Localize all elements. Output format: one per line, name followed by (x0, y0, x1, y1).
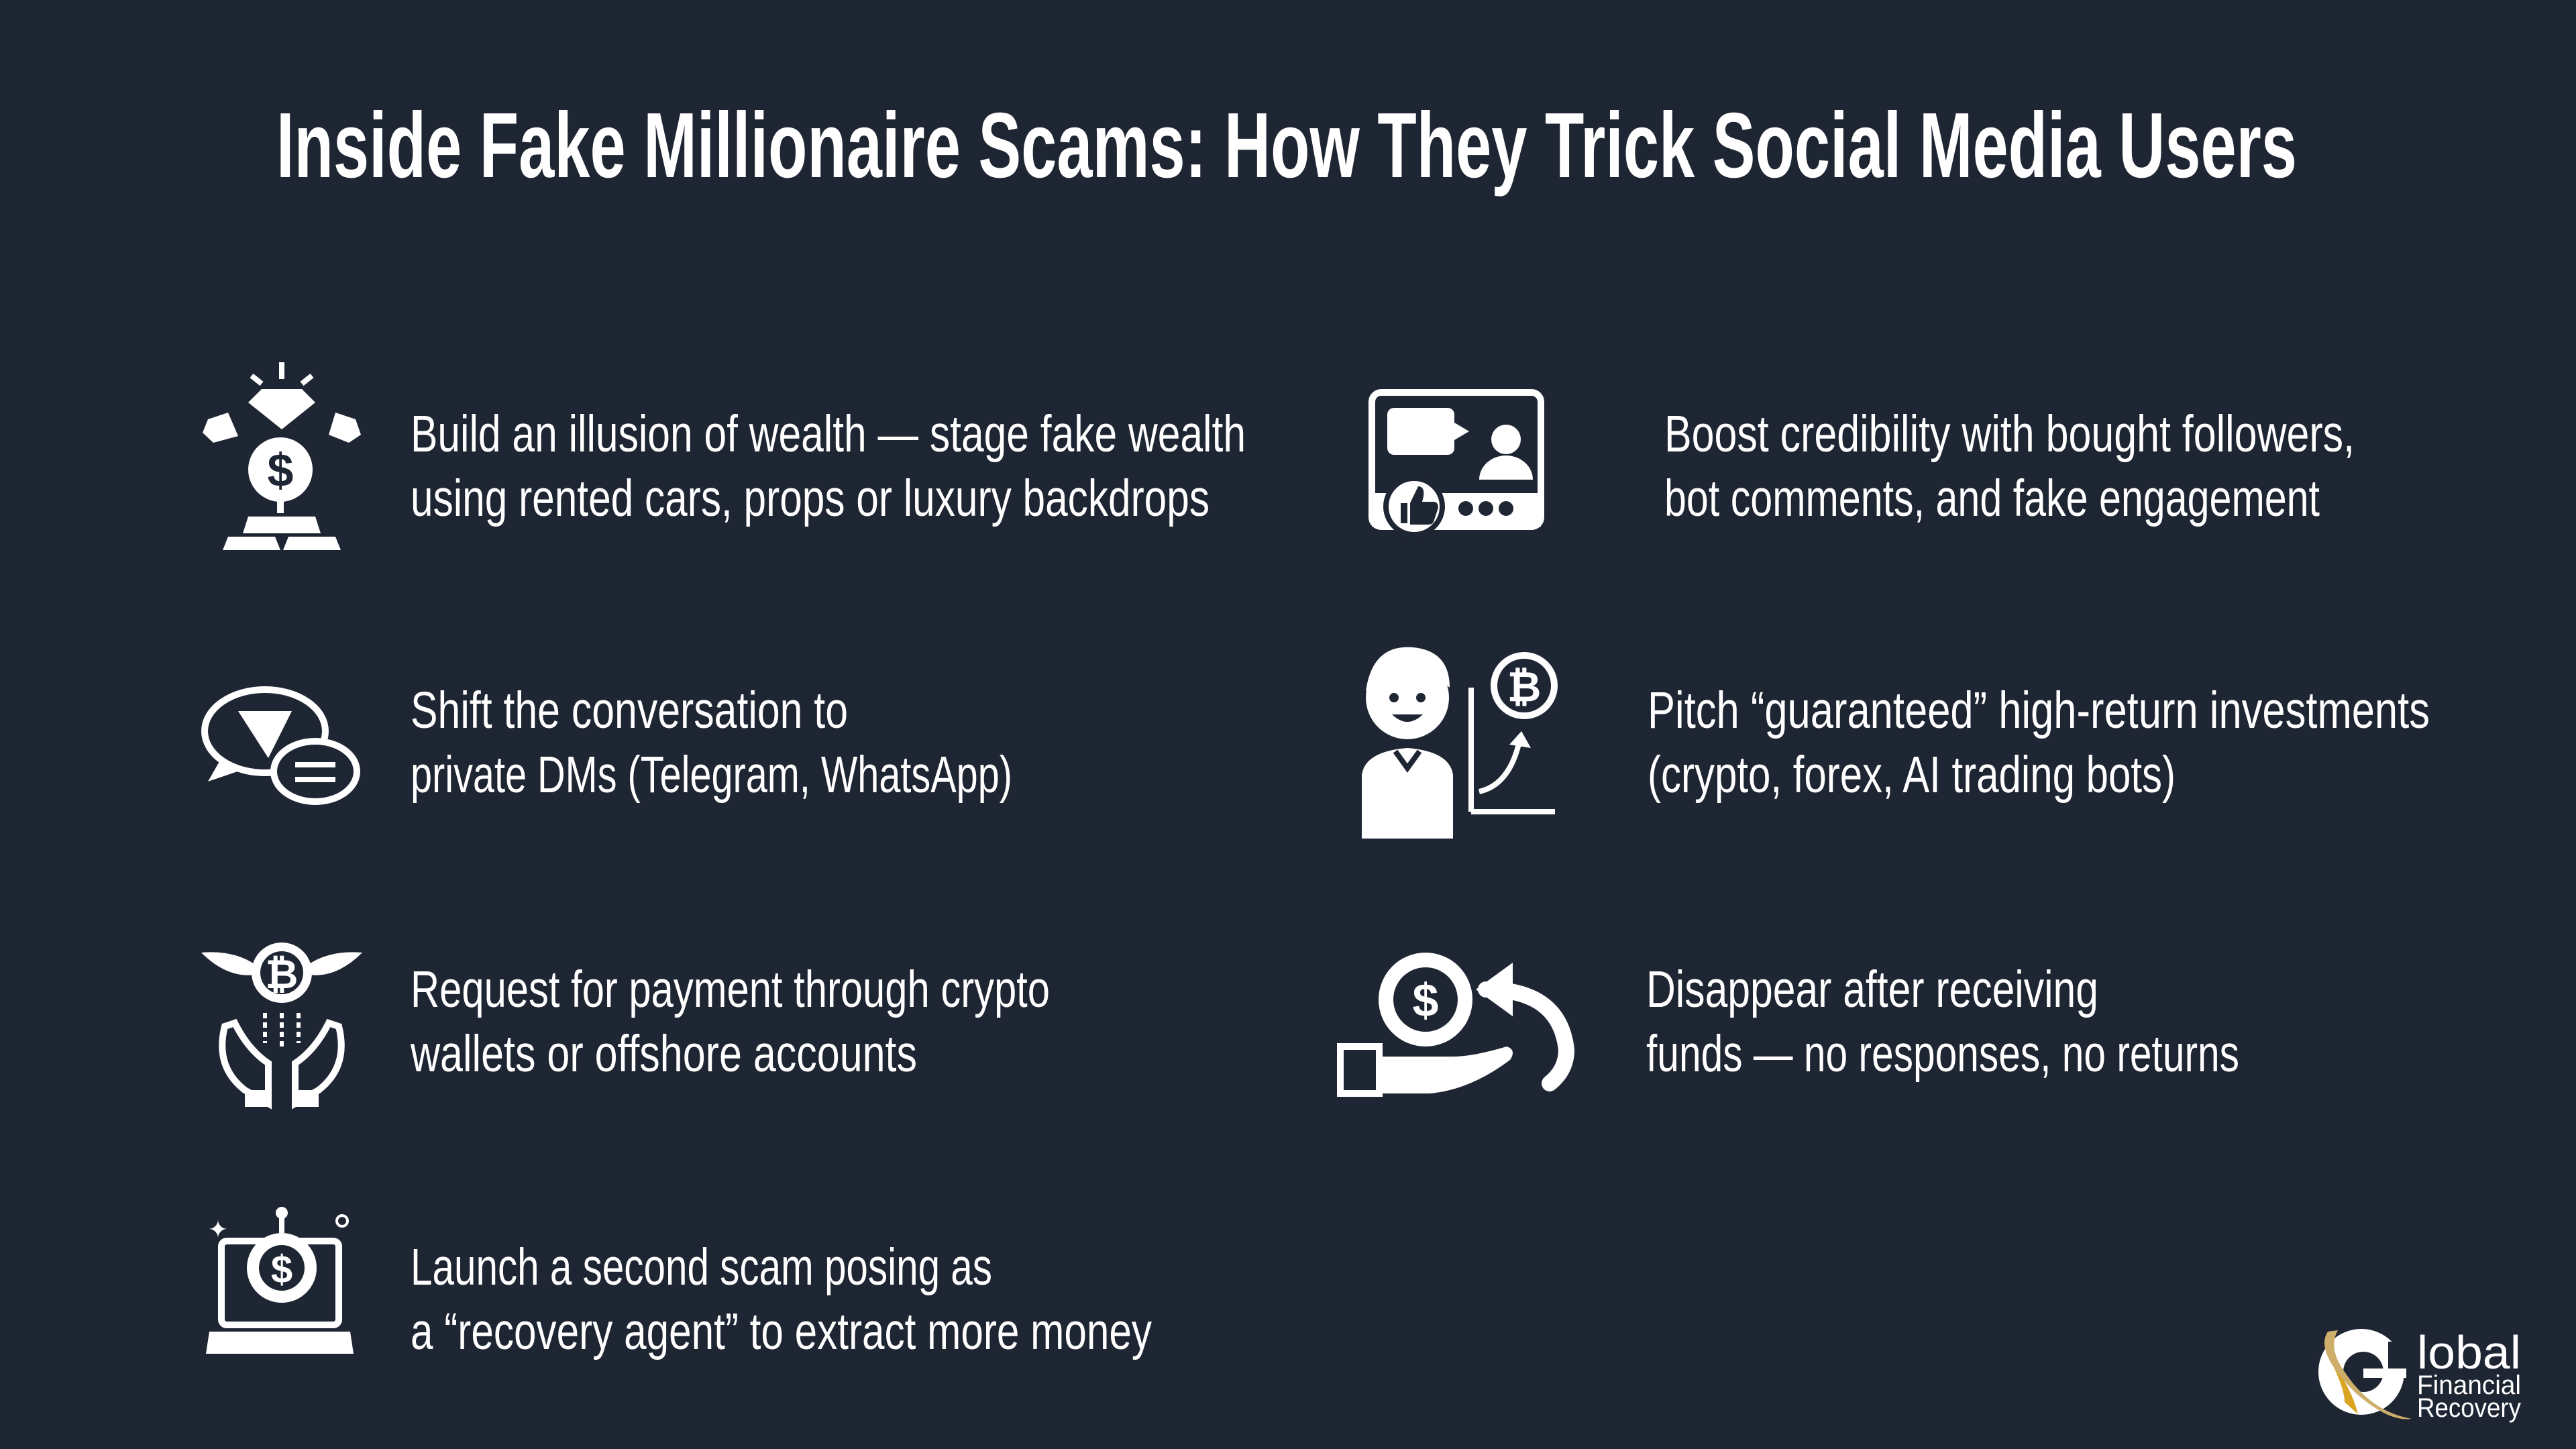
text block (411, 405, 1246, 527)
text block (410, 961, 1050, 1083)
icon: profile screen with like (1372, 392, 1541, 535)
icon: diamond money gold: $ (268, 444, 293, 496)
text block: Disappear after receiving (1646, 961, 2098, 1018)
item: request payment (201, 943, 1050, 1107)
text block: wallets or offshore accounts (410, 1025, 917, 1083)
item: pitch investments (1362, 647, 2430, 839)
icon: coin hand arrow (1340, 953, 1566, 1093)
text block: Build an illusion of wealth — stage fake wealth (411, 405, 1246, 463)
text block: bot comments, and fake engagement (1664, 470, 2320, 527)
text block: (crypto, forex, AI trading bots) (1648, 746, 2176, 804)
icon: laptop with coin: $ (271, 1248, 292, 1291)
logo: Global Financial Recovery: Financial (2417, 1371, 2521, 1400)
icon: man with bitcoin chart (1362, 647, 1555, 839)
icon: coin hand arrow: $ (1413, 974, 1438, 1026)
logo: Global Financial Recovery (2318, 1326, 2521, 1423)
icon: winged bitcoin hands (201, 943, 362, 1107)
logo: Global Financial Recovery: Recovery (2417, 1393, 2521, 1423)
item: boost credibility (1372, 392, 2355, 535)
icon: diamond money gold (203, 362, 361, 550)
text block (411, 1238, 1152, 1360)
item: illusion of wealth (203, 362, 1246, 550)
text block: funds — no responses, no returns (1646, 1025, 2239, 1083)
text block: private DMs (Telegram, WhatsApp) (411, 746, 1012, 804)
logo: Global Financial Recovery: lobal (2417, 1326, 2521, 1379)
icon: winged bitcoin hands: ₿ (266, 952, 298, 997)
text block: a “recovery agent” to extract more money (411, 1303, 1152, 1360)
text block: using rented cars, props or luxury backdrops (411, 470, 1210, 527)
item: disappear (1340, 953, 2239, 1093)
text block: Shift the conversation to (411, 682, 848, 739)
text block (1648, 682, 2430, 804)
text block (1664, 405, 2355, 527)
icon: chat bubbles (205, 690, 357, 802)
text block: Request for payment through crypto (411, 961, 1050, 1018)
text block: Boost credibility with bought followers, (1664, 405, 2355, 463)
text block (1646, 961, 2239, 1083)
item: shift to DMs (205, 682, 1012, 804)
icon: laptop with coin: ✦ (208, 1216, 228, 1243)
icon: man with bitcoin chart: ₿ (1507, 664, 1541, 710)
icon: laptop with coin (206, 1207, 354, 1354)
item: recovery scam (206, 1207, 1152, 1360)
text block (411, 682, 1012, 804)
text block: Launch a second scam posing as (411, 1238, 992, 1296)
